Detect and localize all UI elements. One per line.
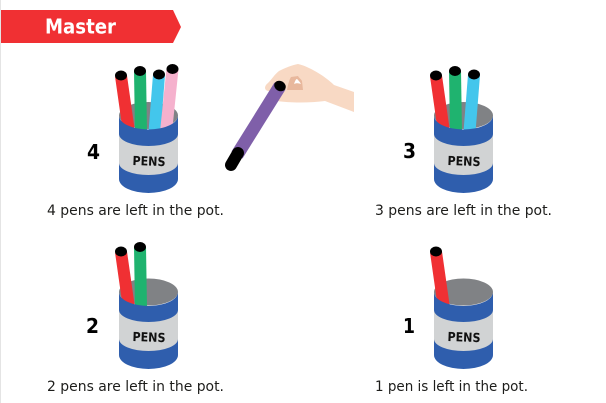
icon: pot with one pen: PENS: [447, 329, 481, 345]
number: 3: 3: [403, 139, 416, 163]
illustration: hand removing purple pen: [231, 64, 354, 165]
panel: 4 pens: [47, 64, 224, 219]
icon: pot with two pens: [115, 242, 178, 369]
number: 4: 4: [87, 140, 100, 164]
number: 2: 2: [86, 314, 99, 338]
icon: pot with one pen: [430, 246, 493, 369]
panel: 3 pens: [375, 66, 552, 219]
icon: purple pen: [237, 86, 280, 155]
panel: 1 pen: [375, 246, 528, 395]
icon: fingers: [287, 76, 303, 90]
icon: hand: [265, 64, 354, 112]
icon: pot with four pens: [115, 64, 178, 193]
caption: 2 pens: 2 pens are left in the pot.: [47, 379, 224, 395]
icon: pot with three pens: PENS: [447, 153, 481, 169]
banner: Master: Master: [45, 14, 116, 38]
caption: 1 pen: 1 pen is left in the pot.: [375, 379, 528, 395]
caption: 4 pens: 4 pens are left in the pot.: [47, 203, 224, 219]
icon: pot with four pens: PENS: [132, 153, 166, 169]
banner: Master: [1, 10, 181, 43]
icon: pot with three pens: [430, 66, 493, 193]
caption: 3 pens: 3 pens are left in the pot.: [375, 203, 552, 219]
icon: pot with two pens: PENS: [132, 329, 166, 345]
number: 1: 1: [403, 314, 415, 338]
panel: 2 pens: [47, 242, 224, 395]
